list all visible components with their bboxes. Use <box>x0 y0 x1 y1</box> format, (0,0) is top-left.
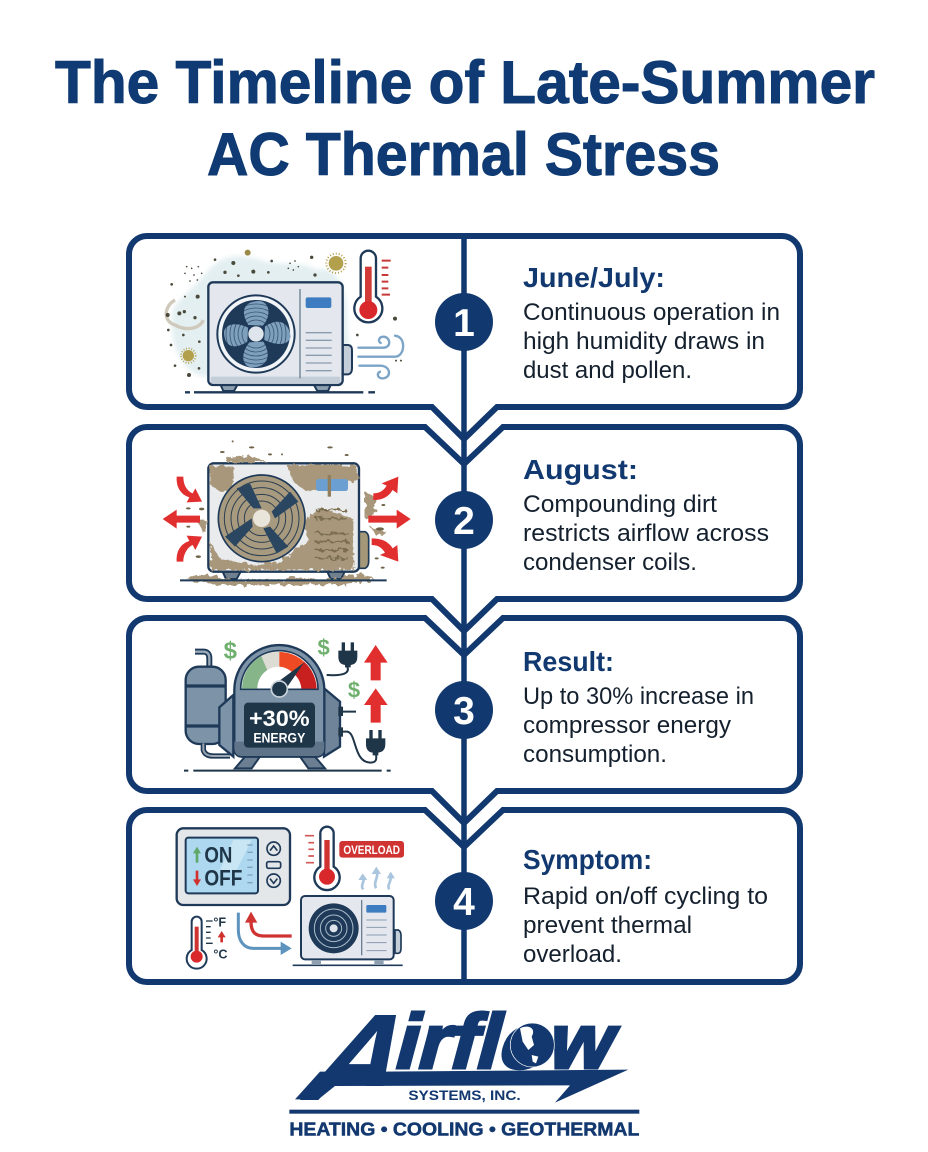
text: step 2: restricts airflow across <box>523 520 769 547</box>
icon: compressor with +30% energy: ENERGY <box>253 731 305 746</box>
central timeline spine <box>461 236 467 982</box>
number badge 2 <box>435 491 493 549</box>
icon: compressor with +30% energy: $ <box>224 637 237 664</box>
icon: compressor with +30% energy: $ <box>318 635 330 660</box>
text: step 4 <box>523 844 768 968</box>
text: step 4: overload. <box>523 941 622 968</box>
logo: Airflow Systems <box>284 989 639 1140</box>
number badge 1 <box>435 293 493 351</box>
icon: thermostat cycling and thermal overload: OFF <box>204 865 242 890</box>
number badge 1: 1 <box>453 302 475 345</box>
logo: Airflow Systems: A <box>284 989 442 1126</box>
text: step 1: Continuous operation in <box>523 299 780 326</box>
text: step 3: Up to 30% increase in <box>523 683 754 710</box>
text: step 4: prevent thermal <box>523 912 692 939</box>
text: step 2: condenser coils. <box>523 549 697 576</box>
title: The Timeline of Late-Summer <box>55 49 875 116</box>
text: step 2: Compounding dirt <box>523 491 717 518</box>
text: step 3 <box>523 646 754 768</box>
text: step 3: compressor energy <box>523 712 731 739</box>
panel: step 3 outline <box>129 618 800 823</box>
icon: thermostat cycling and thermal overload <box>177 827 404 969</box>
text: step 1 <box>523 262 780 384</box>
number badge 4: 4 <box>453 881 475 924</box>
icon: clean AC unit drawing in dust and pollen <box>166 250 403 392</box>
icon: thermostat cycling and thermal overload: °C <box>213 948 228 962</box>
icon: thermostat cycling and thermal overload: °F <box>213 916 226 930</box>
number badge 3: 3 <box>453 690 475 733</box>
icon: compressor with +30% energy: +30% <box>249 706 310 731</box>
panel: step 2 outline <box>129 427 800 631</box>
icon: compressor with +30% energy: $ <box>348 677 360 702</box>
text: step 4: Rapid on/off cycling to <box>523 883 768 910</box>
number badge 4 <box>435 872 493 930</box>
text: step 3: consumption. <box>523 741 667 768</box>
text: step 2: August: <box>523 454 638 485</box>
text: step 2 <box>523 454 769 576</box>
icon: thermostat cycling and thermal overload: ON <box>204 843 232 868</box>
title: AC Thermal Stress <box>207 121 720 188</box>
text: step 1: dust and pollen. <box>523 357 692 384</box>
panel: step 1 outline <box>129 236 800 439</box>
icon: thermostat cycling and thermal overload: OVERLOAD <box>343 844 400 857</box>
number badge 2: 2 <box>453 500 475 543</box>
title <box>55 49 875 188</box>
text: step 1: high humidity draws in <box>523 328 765 355</box>
number badge 3 <box>435 681 493 739</box>
logo: Airflow Systems: irflow <box>387 998 628 1085</box>
text: step 3: Result: <box>523 646 614 677</box>
icon: compressor with +30% energy <box>184 635 391 771</box>
logo: Airflow Systems: HEATING • COOLING • GEOTHERMAL <box>289 1119 639 1140</box>
panel: step 4 outline <box>129 810 800 982</box>
text: step 4: Symptom: <box>523 844 652 875</box>
icon: dirty AC unit with blocked airflow <box>163 440 411 585</box>
logo: Airflow Systems: SYSTEMS, INC. <box>408 1087 521 1103</box>
text: step 1: June/July: <box>523 262 665 293</box>
